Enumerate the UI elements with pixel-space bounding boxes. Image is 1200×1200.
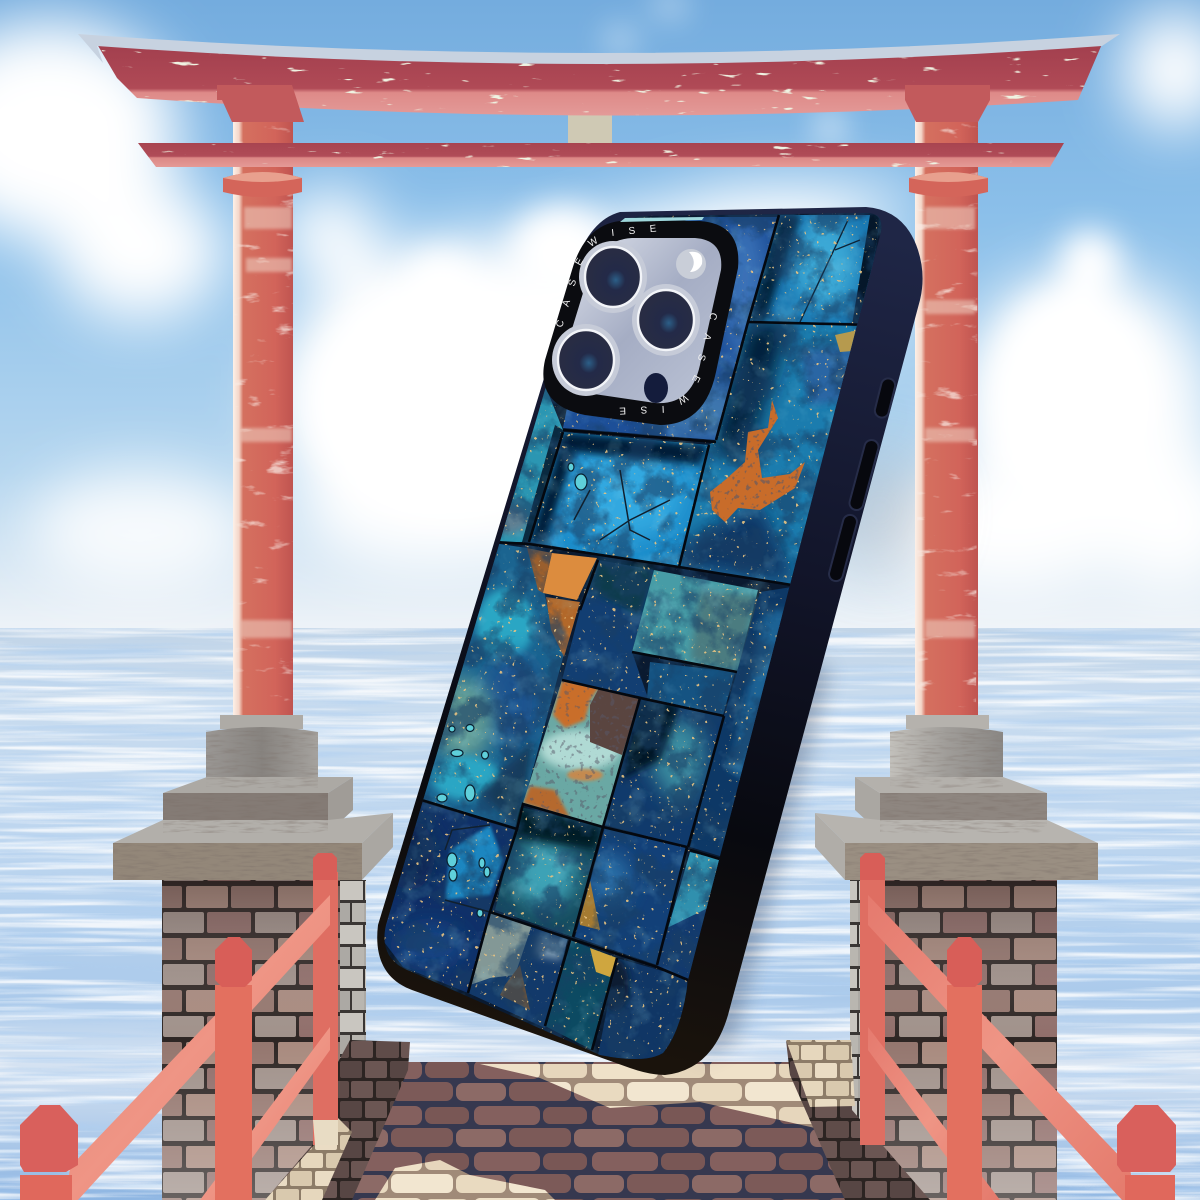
lens right (632, 284, 700, 356)
tile: aqua right (658, 852, 720, 980)
right pillar (908, 100, 988, 720)
left stone base (113, 715, 393, 1200)
tile: orange veined marble (680, 323, 857, 584)
tile: bottom left deep blue (384, 802, 514, 993)
camera ring (543, 221, 738, 425)
post rear (860, 853, 885, 1145)
post middle (947, 937, 982, 1200)
side buttons (827, 377, 897, 583)
tile: orange brown sliver (527, 548, 552, 593)
marble texture overlay (370, 200, 900, 1080)
tile: bottom navy (598, 958, 688, 1059)
tile: rust and aqua (520, 675, 645, 830)
tile: deep blue dotted (575, 825, 690, 970)
flash (676, 249, 706, 279)
camera module (543, 217, 738, 425)
upper rail (868, 895, 1134, 1200)
sunlit paving upper (480, 1064, 815, 1128)
orange block (543, 553, 597, 600)
tile: smoky teal (495, 807, 602, 937)
tile: shadowed teal blue (605, 700, 722, 847)
phone reflection blur (700, 650, 830, 1060)
camera plate (563, 238, 721, 403)
post front (20, 1105, 78, 1200)
lower rail (200, 1027, 330, 1200)
dark veins (445, 470, 670, 912)
pillar caps (217, 85, 990, 122)
post middle (215, 937, 252, 1200)
gold corner (835, 327, 872, 352)
upper crossbeam (78, 34, 1120, 130)
right stone base (815, 715, 1098, 1200)
case artwork (370, 200, 900, 1080)
tile: grey stone with gold (465, 910, 570, 1030)
right railing (860, 853, 1176, 1200)
ring highlight (620, 217, 704, 222)
tile: pale teal speckled (632, 570, 758, 672)
brand text left: CASEWISE (556, 224, 656, 327)
lower rail (868, 1027, 1000, 1200)
tile: large teal blue (423, 544, 564, 827)
brand text right: CASEWISE (620, 313, 717, 415)
center strut (568, 105, 612, 143)
right curb (786, 1040, 930, 1200)
tile: right vertical strip (690, 587, 790, 856)
phone (377, 207, 923, 1075)
left pillar (223, 100, 305, 720)
tile: bright center marble (530, 432, 708, 566)
gold fleck (590, 948, 617, 977)
clouds (0, 0, 1200, 595)
tile: dark blue center (562, 560, 654, 698)
torii gate (78, 34, 1120, 720)
lens bottom (552, 324, 620, 396)
sunlit paving lower (375, 1160, 555, 1200)
rust vein (705, 398, 810, 526)
phone body (377, 207, 923, 1075)
tile: top right marble (750, 215, 880, 323)
lens top (579, 241, 647, 313)
tile: small blue (647, 662, 735, 715)
tile: left teal (500, 388, 563, 542)
shaded paving (345, 1062, 885, 1200)
post front (1117, 1105, 1176, 1200)
tile: dark teal (545, 940, 617, 1050)
upper rail (66, 895, 330, 1200)
left curb (265, 1040, 410, 1200)
sea (0, 628, 1200, 1200)
post rear (313, 853, 338, 1145)
microphone sensor (644, 373, 668, 403)
tile: slate behind camera (563, 217, 777, 440)
sky background (0, 0, 1200, 630)
stone walkway (265, 1040, 930, 1200)
lower crossbeam (138, 143, 1064, 167)
pebbles (437, 378, 856, 917)
left railing (20, 853, 338, 1200)
tile seams (415, 215, 872, 1050)
